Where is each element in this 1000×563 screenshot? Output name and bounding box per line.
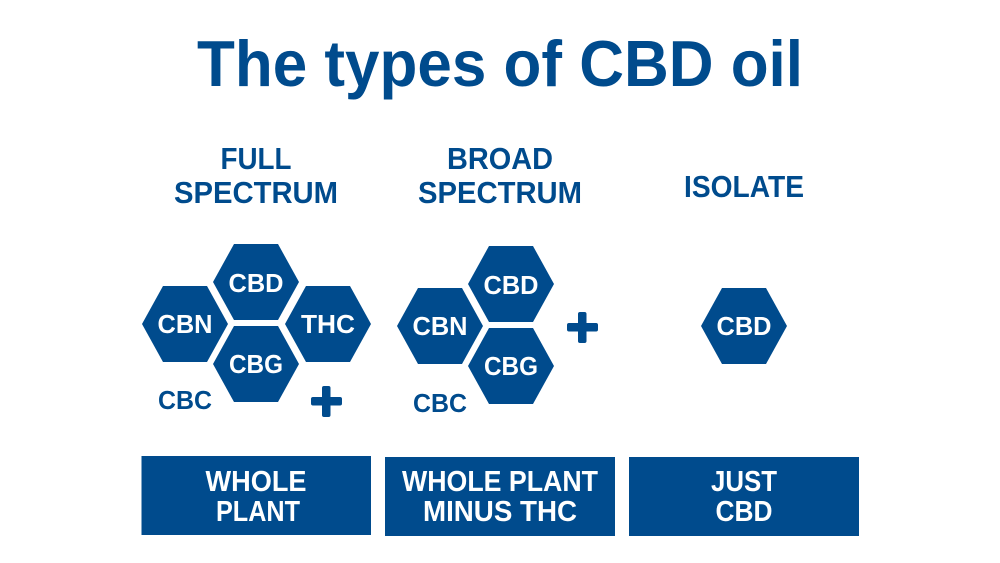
box: just CBD: JUST bbox=[711, 466, 777, 498]
box: whole plant: WHOLE bbox=[206, 466, 306, 498]
box: whole plant bbox=[142, 456, 371, 535]
heading: full spectrum bbox=[174, 141, 338, 210]
icon: plus bbox=[567, 312, 598, 343]
column: full spectrum bbox=[142, 141, 371, 535]
heading: broad spectrum: SPECTRUM bbox=[418, 175, 582, 210]
hexagon: THC: THC bbox=[301, 309, 355, 339]
hexagon: CBG bbox=[468, 328, 554, 404]
box: whole plant minus THC: MINUS THC bbox=[423, 496, 577, 528]
heading: broad spectrum bbox=[418, 141, 582, 210]
hexagon: CBN bbox=[142, 286, 228, 362]
heading: isolate: ISOLATE bbox=[684, 169, 804, 204]
icon: plus bbox=[311, 386, 342, 417]
hexagon: CBD bbox=[213, 244, 299, 320]
hexagon: CBG: CBG bbox=[484, 351, 538, 381]
hexagon: CBN: CBN bbox=[158, 309, 212, 339]
heading: full spectrum: FULL bbox=[220, 141, 292, 176]
heading: broad spectrum: BROAD bbox=[447, 141, 553, 176]
label: CBC: CBC bbox=[158, 385, 212, 415]
heading: full spectrum: SPECTRUM bbox=[174, 175, 338, 210]
label: CBC: CBC bbox=[413, 388, 467, 418]
hexagon: CBD bbox=[701, 288, 787, 364]
hexagon: CBD bbox=[468, 246, 554, 322]
hexagon: CBG bbox=[213, 326, 299, 402]
box: just CBD bbox=[629, 457, 859, 536]
box: whole plant minus THC bbox=[385, 457, 615, 536]
column: isolate bbox=[629, 169, 859, 536]
hexagon: CBD: CBD bbox=[228, 268, 284, 298]
hexagon: THC bbox=[285, 286, 371, 362]
hexagon: CBG: CBG bbox=[229, 349, 283, 379]
hexagon: CBD: CBD bbox=[484, 270, 538, 300]
box: whole plant minus THC: WHOLE PLANT bbox=[402, 466, 598, 498]
box: whole plant: PLANT bbox=[216, 496, 300, 528]
title: The types of CBD oil bbox=[197, 27, 803, 100]
hexagon: CBN bbox=[397, 288, 483, 364]
box: just CBD: CBD bbox=[716, 496, 772, 528]
hexagon: CBN: CBN bbox=[412, 311, 468, 341]
hexagon: CBD: CBD bbox=[716, 311, 772, 341]
column: broad spectrum bbox=[385, 141, 615, 536]
